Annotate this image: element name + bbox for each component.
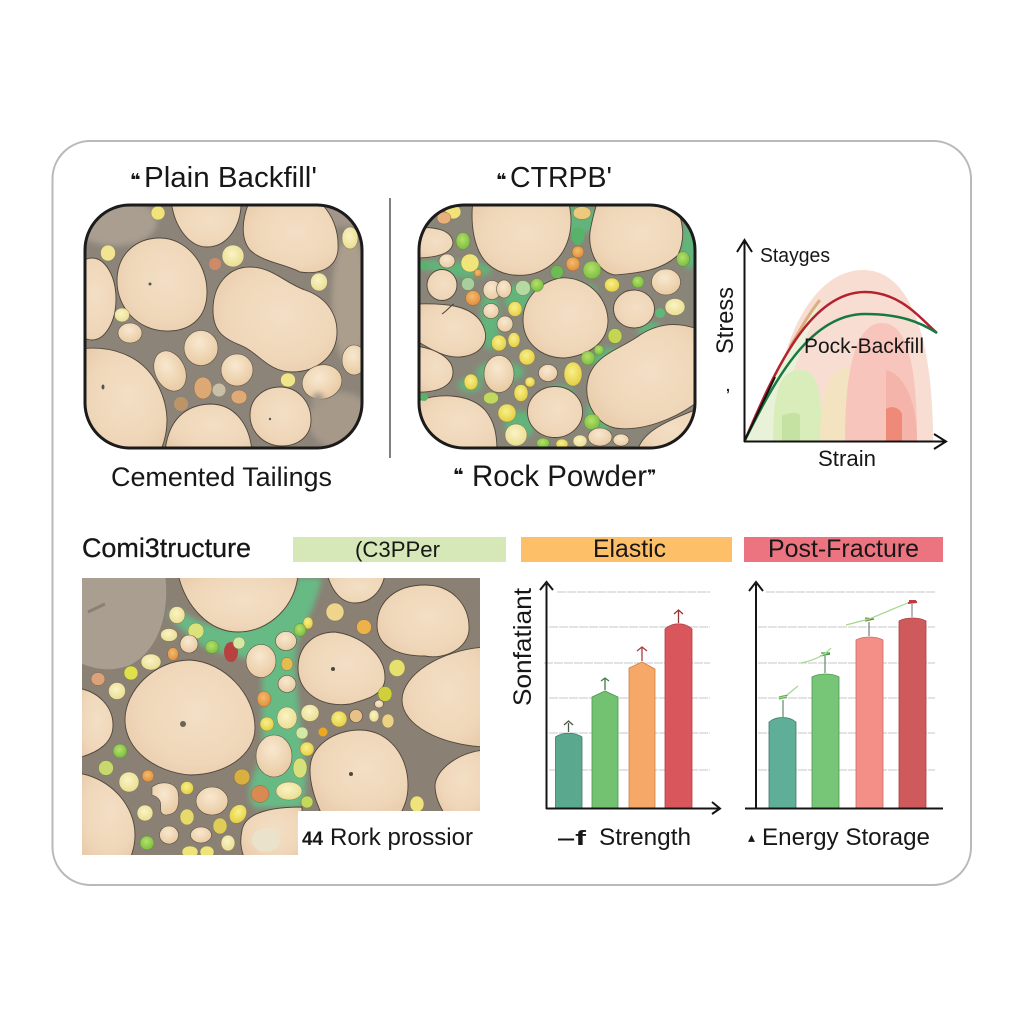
stage header: Elastic <box>521 536 732 563</box>
outer rounded frame <box>52 141 971 885</box>
bar: strength 2 <box>592 691 618 808</box>
panel: plain backfill microstructure <box>84 204 364 450</box>
bar: strength 1 <box>556 733 582 808</box>
chart: stress-strain curves: Strain <box>818 446 876 471</box>
label: Energy Storage: ▴ <box>748 829 755 845</box>
bar chart: strength <box>509 582 720 814</box>
label: Strength: Strength <box>599 824 691 851</box>
chart: stress-strain curves: , <box>726 378 730 394</box>
label: Strength <box>557 824 691 851</box>
small bar arrows <box>564 610 683 732</box>
bar: strength 4 <box>665 624 692 808</box>
bar: energy 2 <box>812 674 839 808</box>
bar chart: energy storage <box>745 582 943 809</box>
label: Cemented Tailings: Cemented Tailings <box>111 462 332 492</box>
bar: energy 1 <box>769 718 796 808</box>
heading: Plain Backfill: ❝ <box>130 170 141 190</box>
stage header: Elastic: Elastic <box>593 536 666 563</box>
heading: Plain Backfill: Plain Backfill' <box>144 162 317 194</box>
heading: CTRPB: ❝ <box>496 170 507 190</box>
heading: CTRPB: CTRPB' <box>510 162 612 194</box>
heading: Constructure: Comi3tructure <box>82 533 251 563</box>
bar: energy 3 <box>856 637 883 808</box>
chart: stress-strain curves: Stress <box>712 287 739 354</box>
chart: stress-strain curves: Pock-Backfill <box>804 335 924 358</box>
label: Rock powder: Rork prossior <box>330 824 473 851</box>
infographic canvas <box>52 140 972 886</box>
bar: strength 3 <box>629 662 655 808</box>
label: Rock Powder: ❝ <box>453 465 464 485</box>
panel: composite microstructure <box>78 574 485 860</box>
label: Rock Powder: ❞ <box>647 468 656 485</box>
label: Strength: –f <box>557 828 587 850</box>
divider between panels <box>389 198 391 458</box>
panel: CTRPB microstructure <box>415 200 700 452</box>
bar chart: strength: Sonfatiant <box>509 588 537 706</box>
bar: energy 4 <box>899 618 926 808</box>
stage header: Post-Fracture: Post-Fracture <box>768 535 919 563</box>
trend marks above bars <box>779 601 917 717</box>
chart: stress-strain curves <box>712 240 946 471</box>
label: Rock Powder: Rock Powder <box>472 460 647 493</box>
chart: stress-strain curves: Stayges <box>760 245 830 267</box>
label: Rock powder: 44 <box>302 829 323 850</box>
stage header: CPPer <box>293 537 506 562</box>
stage header: CPPer: (C3PPer <box>355 537 440 562</box>
label: Energy Storage: Energy Storage <box>762 824 930 851</box>
